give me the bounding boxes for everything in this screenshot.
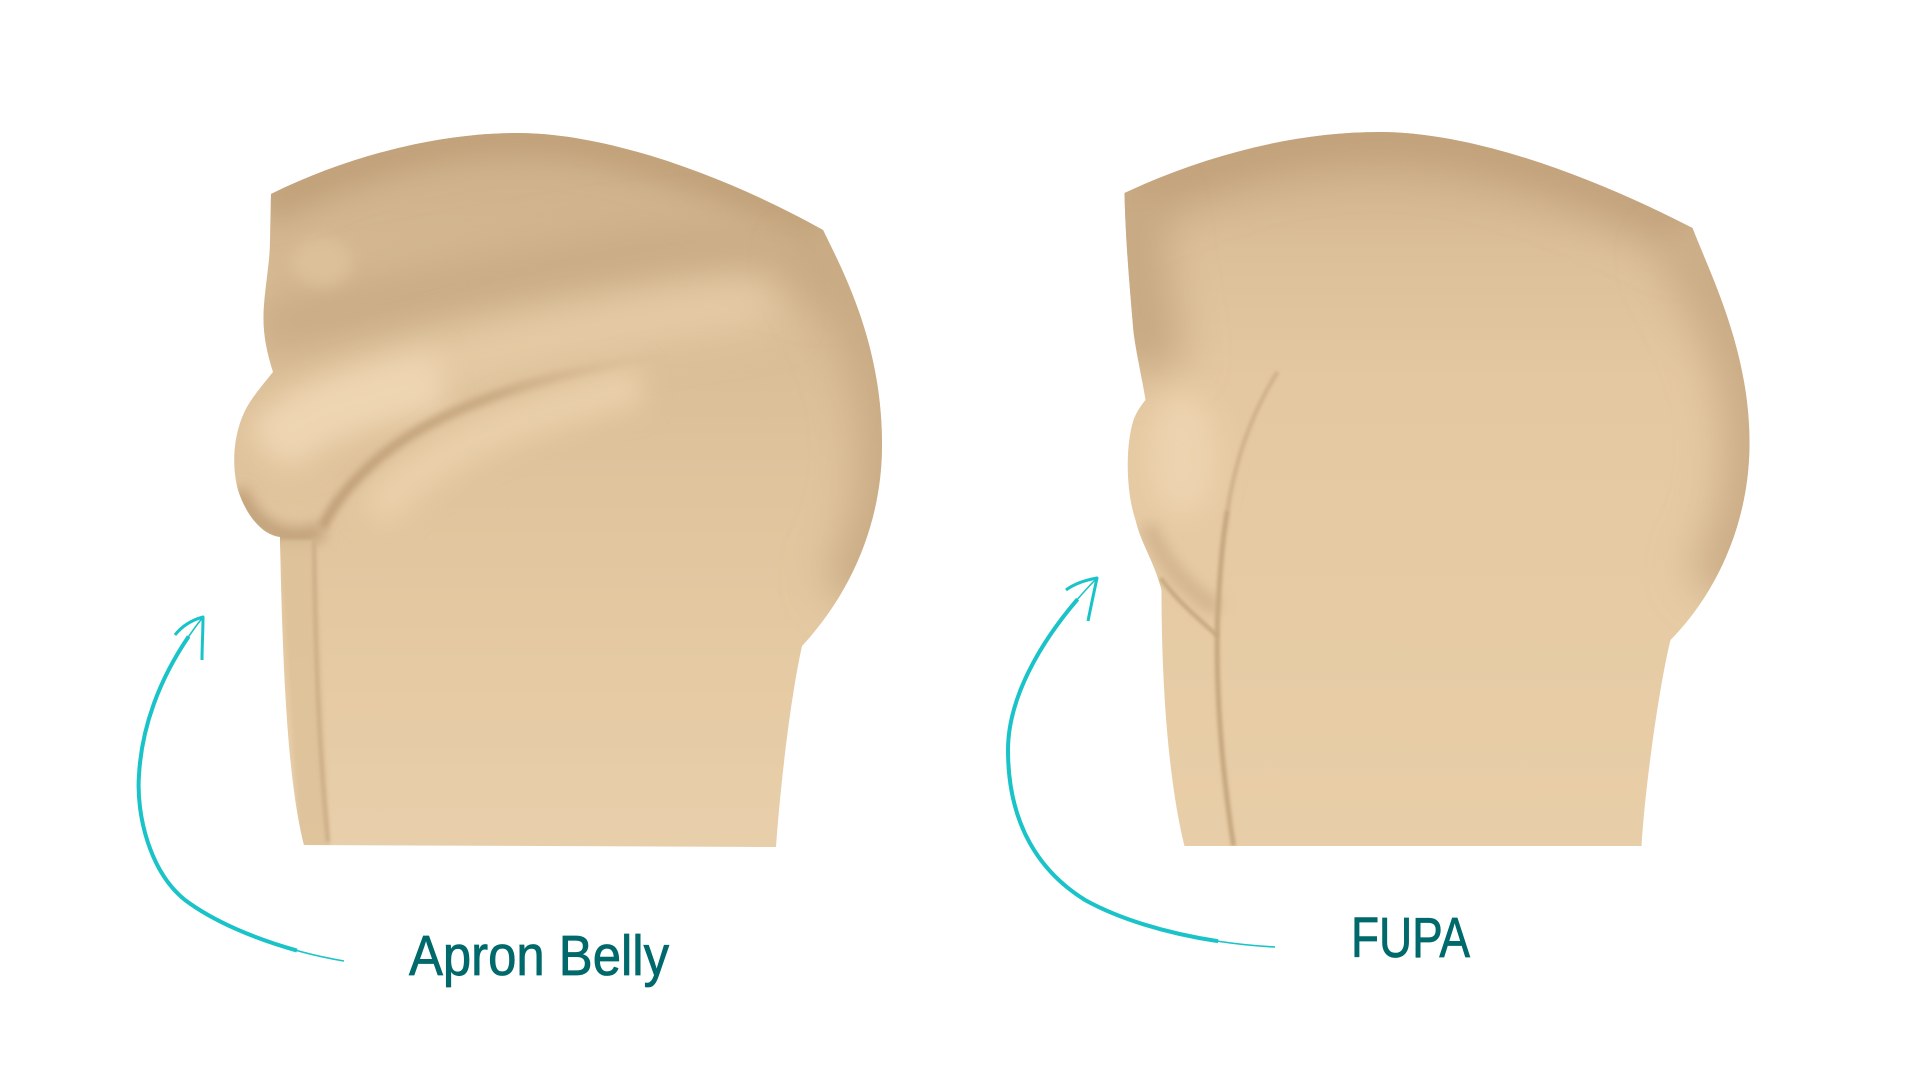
highlight: pubic bulge — [1154, 400, 1212, 506]
infographic canvas — [136, 132, 1750, 988]
arrow: FUPA — [1008, 578, 1275, 947]
shading: top edge shadow — [262, 135, 830, 238]
highlight: upper fold band — [426, 270, 778, 382]
crease: vertical thigh line — [314, 538, 328, 842]
shading: top edge shadow — [1116, 135, 1700, 235]
crease: bulge base line — [1160, 578, 1218, 636]
illustration: FUPA torso — [1116, 132, 1766, 846]
crease: groin line lower — [1217, 510, 1234, 846]
shading: right side shadow — [822, 238, 882, 606]
illustration: apron belly torso — [234, 133, 895, 850]
shading: right side shadow — [1696, 235, 1766, 595]
highlight: apron fold — [268, 380, 440, 450]
crease: groin line upper — [1228, 372, 1278, 510]
label: FUPA: FUPA — [1351, 906, 1470, 970]
arrow: apron belly — [139, 617, 344, 961]
highlight: below fold — [375, 385, 640, 515]
highlight: navel area — [304, 246, 344, 282]
shading: upper left shadow — [1120, 195, 1150, 370]
crease: apron fold line — [318, 368, 594, 530]
shading: bulge underside — [1148, 525, 1218, 610]
shading: upper abdomen dark band — [255, 250, 840, 330]
shading: left thigh strip — [280, 540, 330, 850]
shading: apron underside — [238, 490, 322, 537]
label: Apron Belly: Apron Belly — [409, 924, 669, 988]
